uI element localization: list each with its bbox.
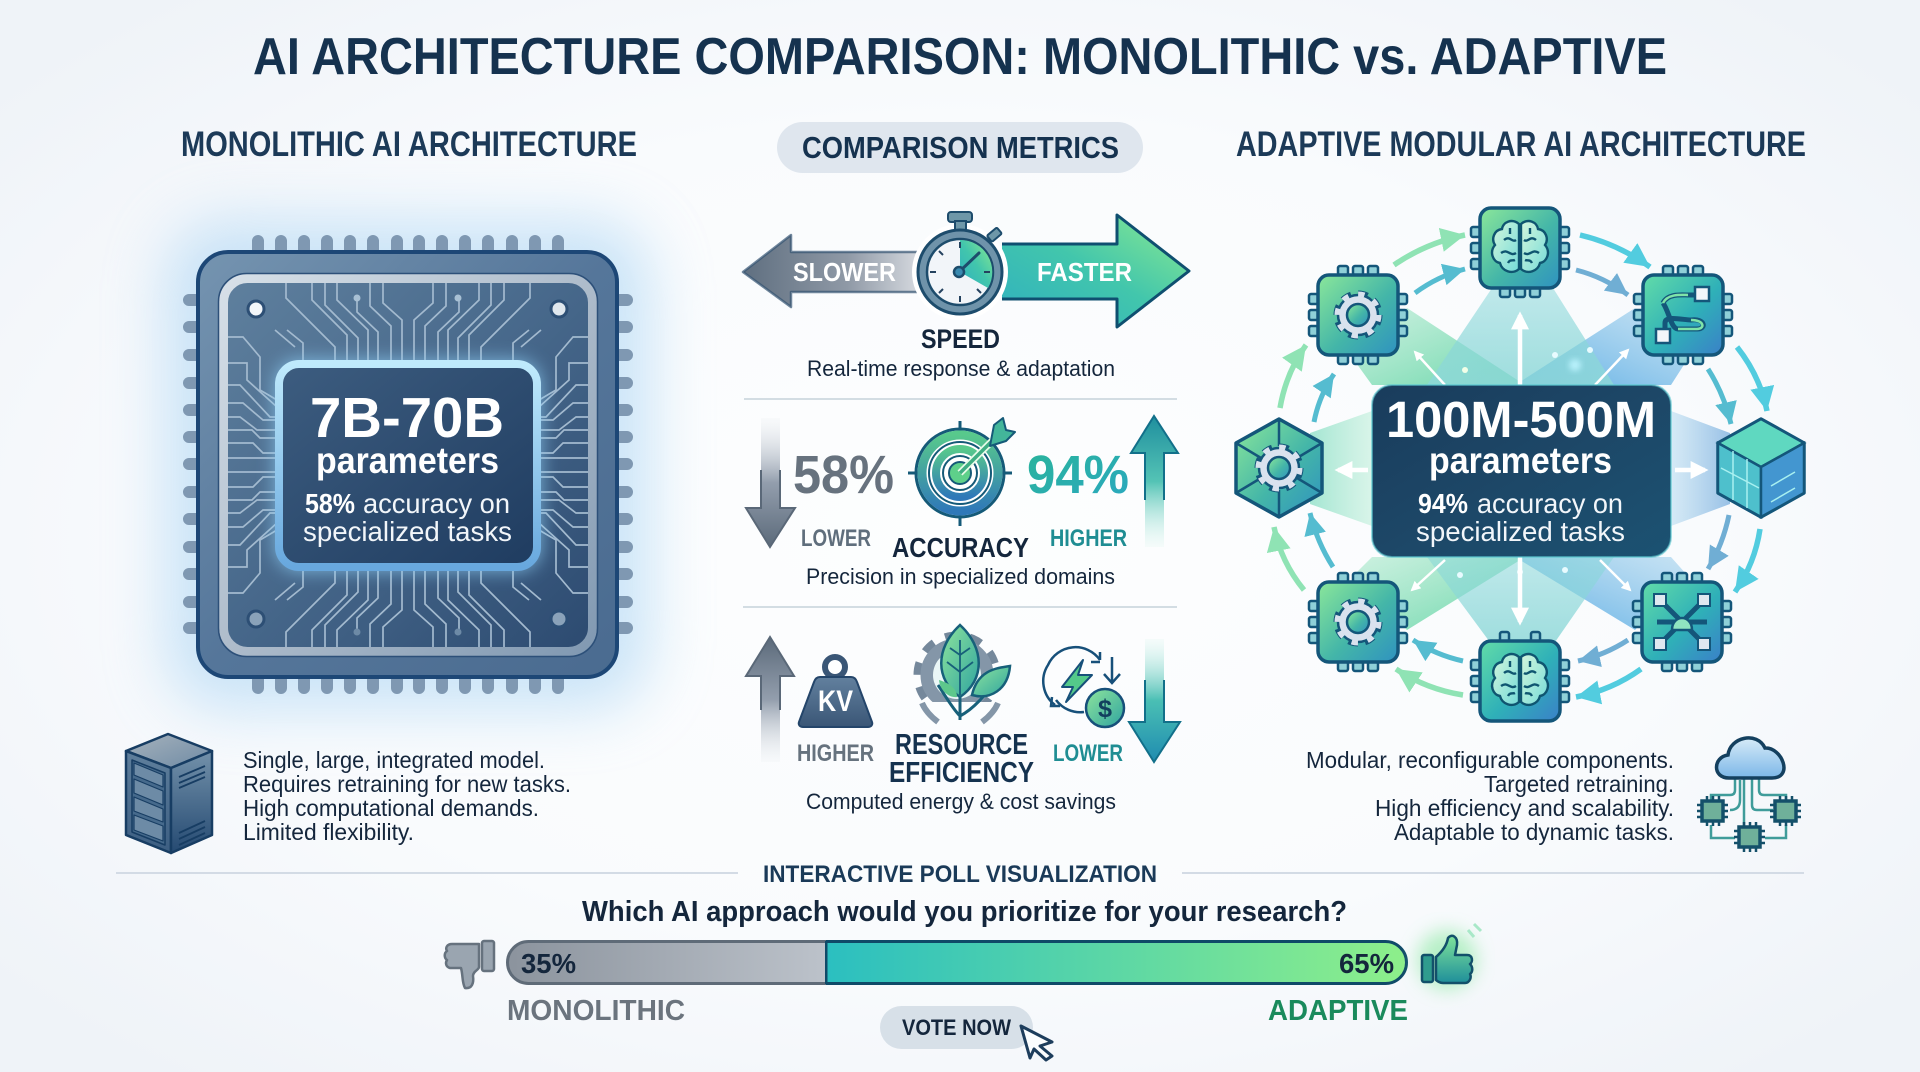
panel: monolithic chip [165,220,651,710]
poll question: Which AI approach would you prioritize for your research? [582,896,1347,928]
caption: resource efficiency: Computed energy & cost savings [806,789,1116,814]
circuit traces [228,283,588,647]
icon: weight [799,657,872,727]
module: top-right workflow [1634,266,1732,364]
text block: adaptive traits: Modular, reconfigurable components. [1306,747,1674,773]
pill: comparison metrics: COMPARISON METRICS [802,130,1119,165]
poll heading: INTERACTIVE POLL VISUALIZATION [763,861,1157,888]
center readout: 100M-500M [1386,391,1656,448]
panel: adaptive modular diagram [1236,208,1804,721]
arrow: faster: FASTER [1037,257,1132,287]
pill: comparison metrics [777,122,1143,173]
light beams [1310,288,1730,645]
core readout [279,364,537,567]
value: 35%: 35% [521,948,576,979]
metric: speed [743,212,1189,381]
center readout: specialized tasks [1416,516,1625,547]
core readout: 7B-70B [310,386,504,450]
label: higher: HIGHER [797,740,874,767]
button: vote now [880,1006,1033,1049]
label: lower: LOWER [1053,740,1123,767]
label: adaptive: ADAPTIVE [1268,995,1408,1027]
core readout: parameters [316,440,499,481]
caption: speed: Real-time response & adaptation [807,356,1115,381]
module: left hexagon gear [1236,419,1322,517]
label: accuracy: ACCURACY [892,532,1029,563]
core readout: 58% [305,488,355,519]
text block: monolithic traits: Limited flexibility. [243,819,414,845]
core readout: specialized tasks [303,516,512,547]
text block: adaptive traits [1306,747,1674,845]
button: vote now: VOTE NOW [902,1015,1011,1040]
metric: resource efficiency [746,625,1180,814]
center readout: 94% [1418,488,1468,519]
icon: cloud with connected chips [1697,738,1801,852]
heading: monolithic architecture: MONOLITHIC AI ARCHITECTURE [181,125,637,164]
text block: adaptive traits: Targeted retraining. [1484,771,1674,797]
arrow: lower accuracy [746,418,795,547]
icon: gear with plant [919,625,1010,726]
module: top-left gear [1309,266,1407,364]
icon: stopwatch [912,212,1008,320]
center readout: accuracy on [1477,488,1623,519]
arrow: higher resource use [746,637,794,762]
value: 65%: 65% [1339,948,1394,979]
module: bottom-left gear [1309,573,1407,671]
module: right cube [1718,419,1804,517]
mounting holes [248,301,567,627]
module: bottom-right network [1633,573,1731,671]
center readout [1372,385,1671,557]
white data-flow arrows [1338,315,1705,622]
label: monolithic: MONOLITHIC [507,995,685,1027]
heading: adaptive architecture: ADAPTIVE MODULAR AI ARCHITECTURE [1236,125,1806,164]
module: top brain [1471,208,1569,297]
module: bottom brain [1471,632,1569,721]
arrow: slower: SLOWER [793,257,896,287]
label: lower: LOWER [801,525,871,552]
icon: energy and cost savings [1043,647,1124,727]
text block: adaptive traits: Adaptable to dynamic tasks. [1394,819,1674,845]
poll section [116,861,1804,1060]
icon: cursor [1021,1026,1052,1060]
label: resource efficiency [889,729,1034,789]
label: speed: SPEED [921,324,1000,354]
metric: accuracy [746,416,1178,589]
outer ring arrows [1274,235,1767,697]
label: resource efficiency: EFFICIENCY [889,757,1034,789]
arrow: lower resource use [1129,639,1180,762]
value: 94%: 94% [1027,445,1129,505]
arrow: faster [1002,215,1189,327]
icon: weight: KV [818,685,853,718]
label: higher: HIGHER [1050,525,1127,552]
icon: thumbs down [445,941,494,988]
text block: monolithic traits: Single, large, integrated model. [243,747,545,773]
center readout: parameters [1429,440,1612,481]
text block: monolithic traits [243,747,571,845]
icon: thumbs up [1417,924,1481,990]
icon: server [126,734,212,853]
arrow: slower [743,235,917,307]
text block: monolithic traits: High computational demands. [243,795,539,821]
inner ring arrows [1310,269,1731,661]
text block: adaptive traits: High efficiency and scalability. [1375,795,1674,821]
core readout: accuracy on [363,488,510,519]
value: 58%: 58% [793,445,894,505]
arrow: higher accuracy [1131,416,1178,547]
poll bar [508,941,1406,984]
icon: energy and cost savings: $ [1098,695,1112,723]
caption: accuracy: Precision in specialized domains [806,564,1115,589]
label: resource efficiency: RESOURCE [895,729,1028,761]
text block: monolithic traits: Requires retraining for new tasks. [243,771,571,797]
title: AI ARCHITECTURE COMPARISON: MONOLITHIC vs. ADAPTIVE [253,28,1667,86]
icon: target [908,418,1015,526]
